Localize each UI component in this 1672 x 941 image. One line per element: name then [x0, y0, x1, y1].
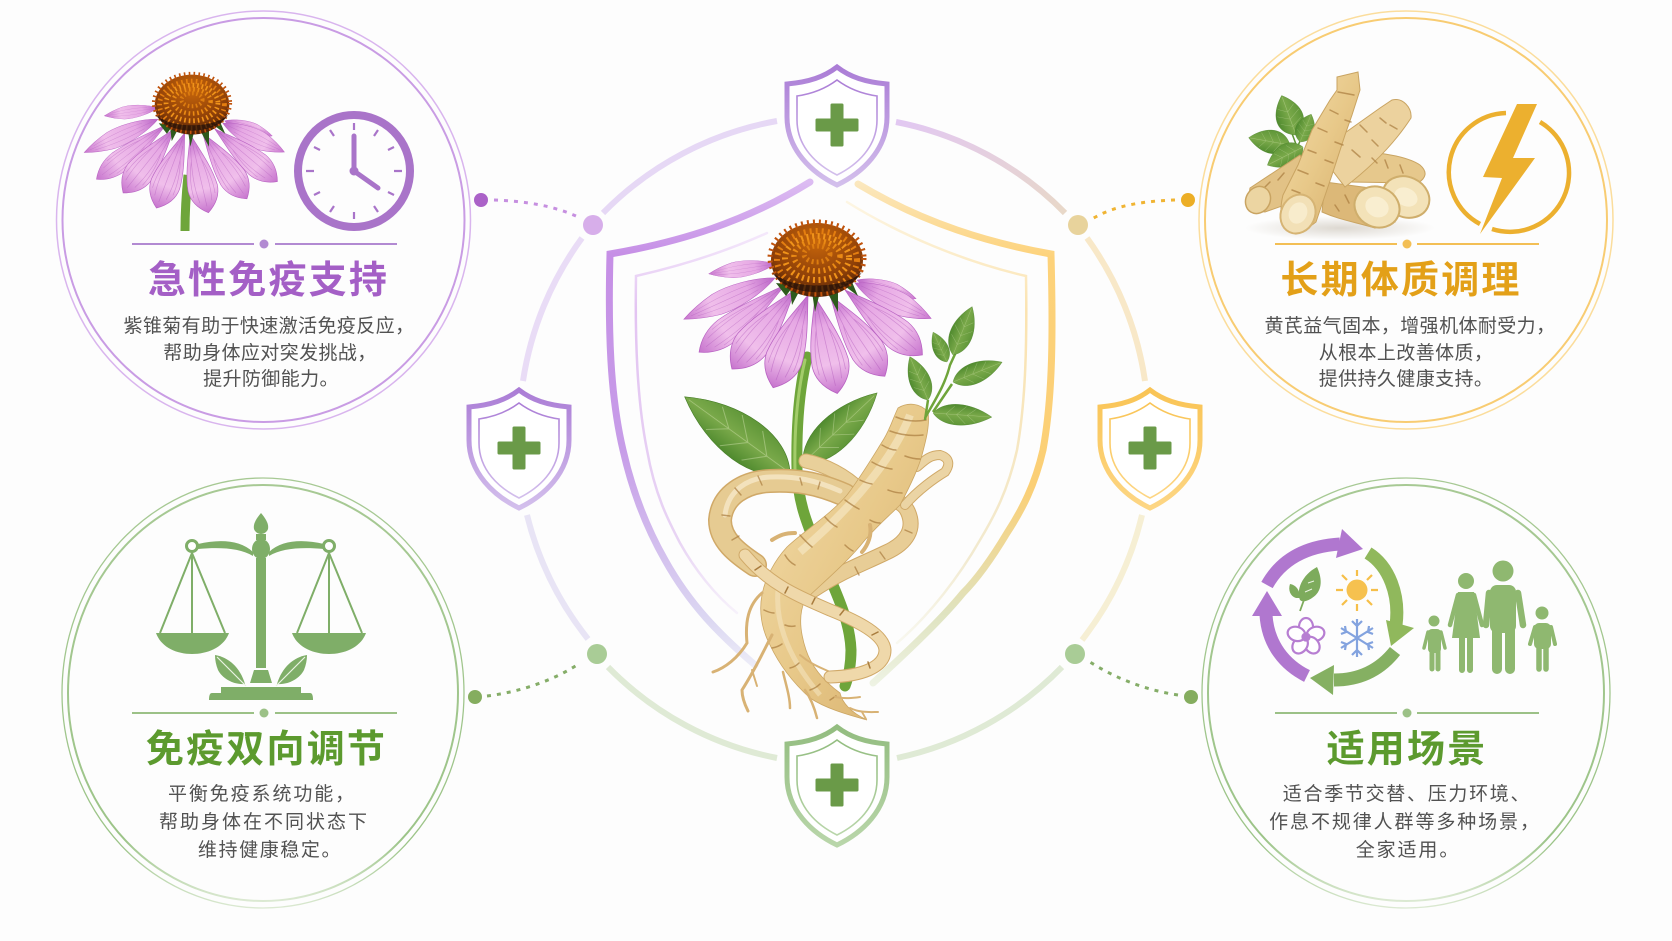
description: 平衡免疫系统功能， [168, 783, 356, 805]
stem [795, 357, 851, 686]
divider [132, 240, 397, 248]
icon: echinacea [80, 74, 288, 231]
divider [132, 708, 397, 718]
icon: leaf season [1289, 567, 1321, 611]
ring nodes [583, 215, 1088, 664]
divider [1275, 708, 1539, 718]
heading: 急性免疫支持 [148, 260, 389, 302]
rootlets [713, 525, 878, 719]
orbit ring [523, 121, 1145, 758]
sprig of leaves [900, 303, 1006, 427]
leaves [1247, 91, 1320, 175]
panel rings [62, 478, 464, 908]
heading: 免疫双向调节 [146, 729, 387, 771]
description: 帮助身体应对突发挑战， [163, 342, 377, 364]
description: 适合季节交替、压力环境、 [1283, 783, 1531, 805]
connector: top left [474, 193, 578, 217]
panel: long-term constitution [1199, 11, 1613, 429]
large central shield [609, 182, 1052, 683]
icon: family [1424, 560, 1555, 670]
panel: acute immune support [56, 11, 470, 429]
icon: lightning [1449, 104, 1569, 234]
icon: snowflake [1341, 619, 1373, 657]
description: 维持健康稳定。 [198, 839, 342, 861]
icon: season cycle arrows [1252, 529, 1414, 695]
front root strand [745, 555, 885, 677]
root shadow [1245, 216, 1435, 240]
central illustration: echinacea and root [672, 222, 1006, 720]
panel rings [1202, 478, 1610, 908]
shield: bottom [787, 727, 887, 845]
heading: 适用场景 [1327, 729, 1487, 771]
icon: astragalus roots [1241, 72, 1436, 240]
description: 提供持久健康支持。 [1319, 368, 1493, 390]
connector: bottom right [1090, 662, 1198, 704]
icon: sun [1336, 570, 1378, 611]
panel: applicable scenarios [1202, 478, 1610, 908]
icon: clock [298, 115, 410, 227]
ginseng main root [761, 404, 929, 720]
icon: balance scale [156, 513, 366, 700]
description [1264, 315, 1556, 390]
description [123, 315, 415, 390]
description: 帮助身体在不同状态下 [159, 811, 369, 833]
root cut ends [1241, 169, 1436, 239]
right root branches [813, 455, 948, 590]
description: 作息不规律人群等多种场景， [1269, 811, 1541, 833]
roots [1249, 72, 1425, 230]
description: 从根本上改善体质， [1319, 342, 1493, 364]
shield: right [1100, 390, 1200, 508]
root texture [1262, 92, 1403, 214]
description: 黄芪益气固本，增强机体耐受力， [1264, 315, 1556, 337]
flower head [679, 222, 936, 398]
icon: flower [1286, 618, 1326, 656]
heading: 长期体质调理 [1280, 260, 1522, 302]
panel: two-way immune regulation [62, 478, 464, 908]
panel rings [56, 11, 470, 429]
connector: top right [1092, 193, 1195, 219]
description: 紫锥菊有助于快速激活免疫反应， [123, 315, 415, 337]
shield: left [469, 390, 569, 508]
panel rings [1199, 11, 1613, 429]
description [159, 783, 369, 861]
description: 提升防御能力。 [203, 368, 339, 390]
stem leaves [672, 379, 889, 491]
divider [1275, 240, 1539, 248]
back root strand [720, 461, 860, 565]
connector: bottom left [468, 663, 580, 704]
description: 全家适用。 [1356, 839, 1460, 861]
shield: top [787, 67, 887, 185]
description [1269, 783, 1541, 861]
